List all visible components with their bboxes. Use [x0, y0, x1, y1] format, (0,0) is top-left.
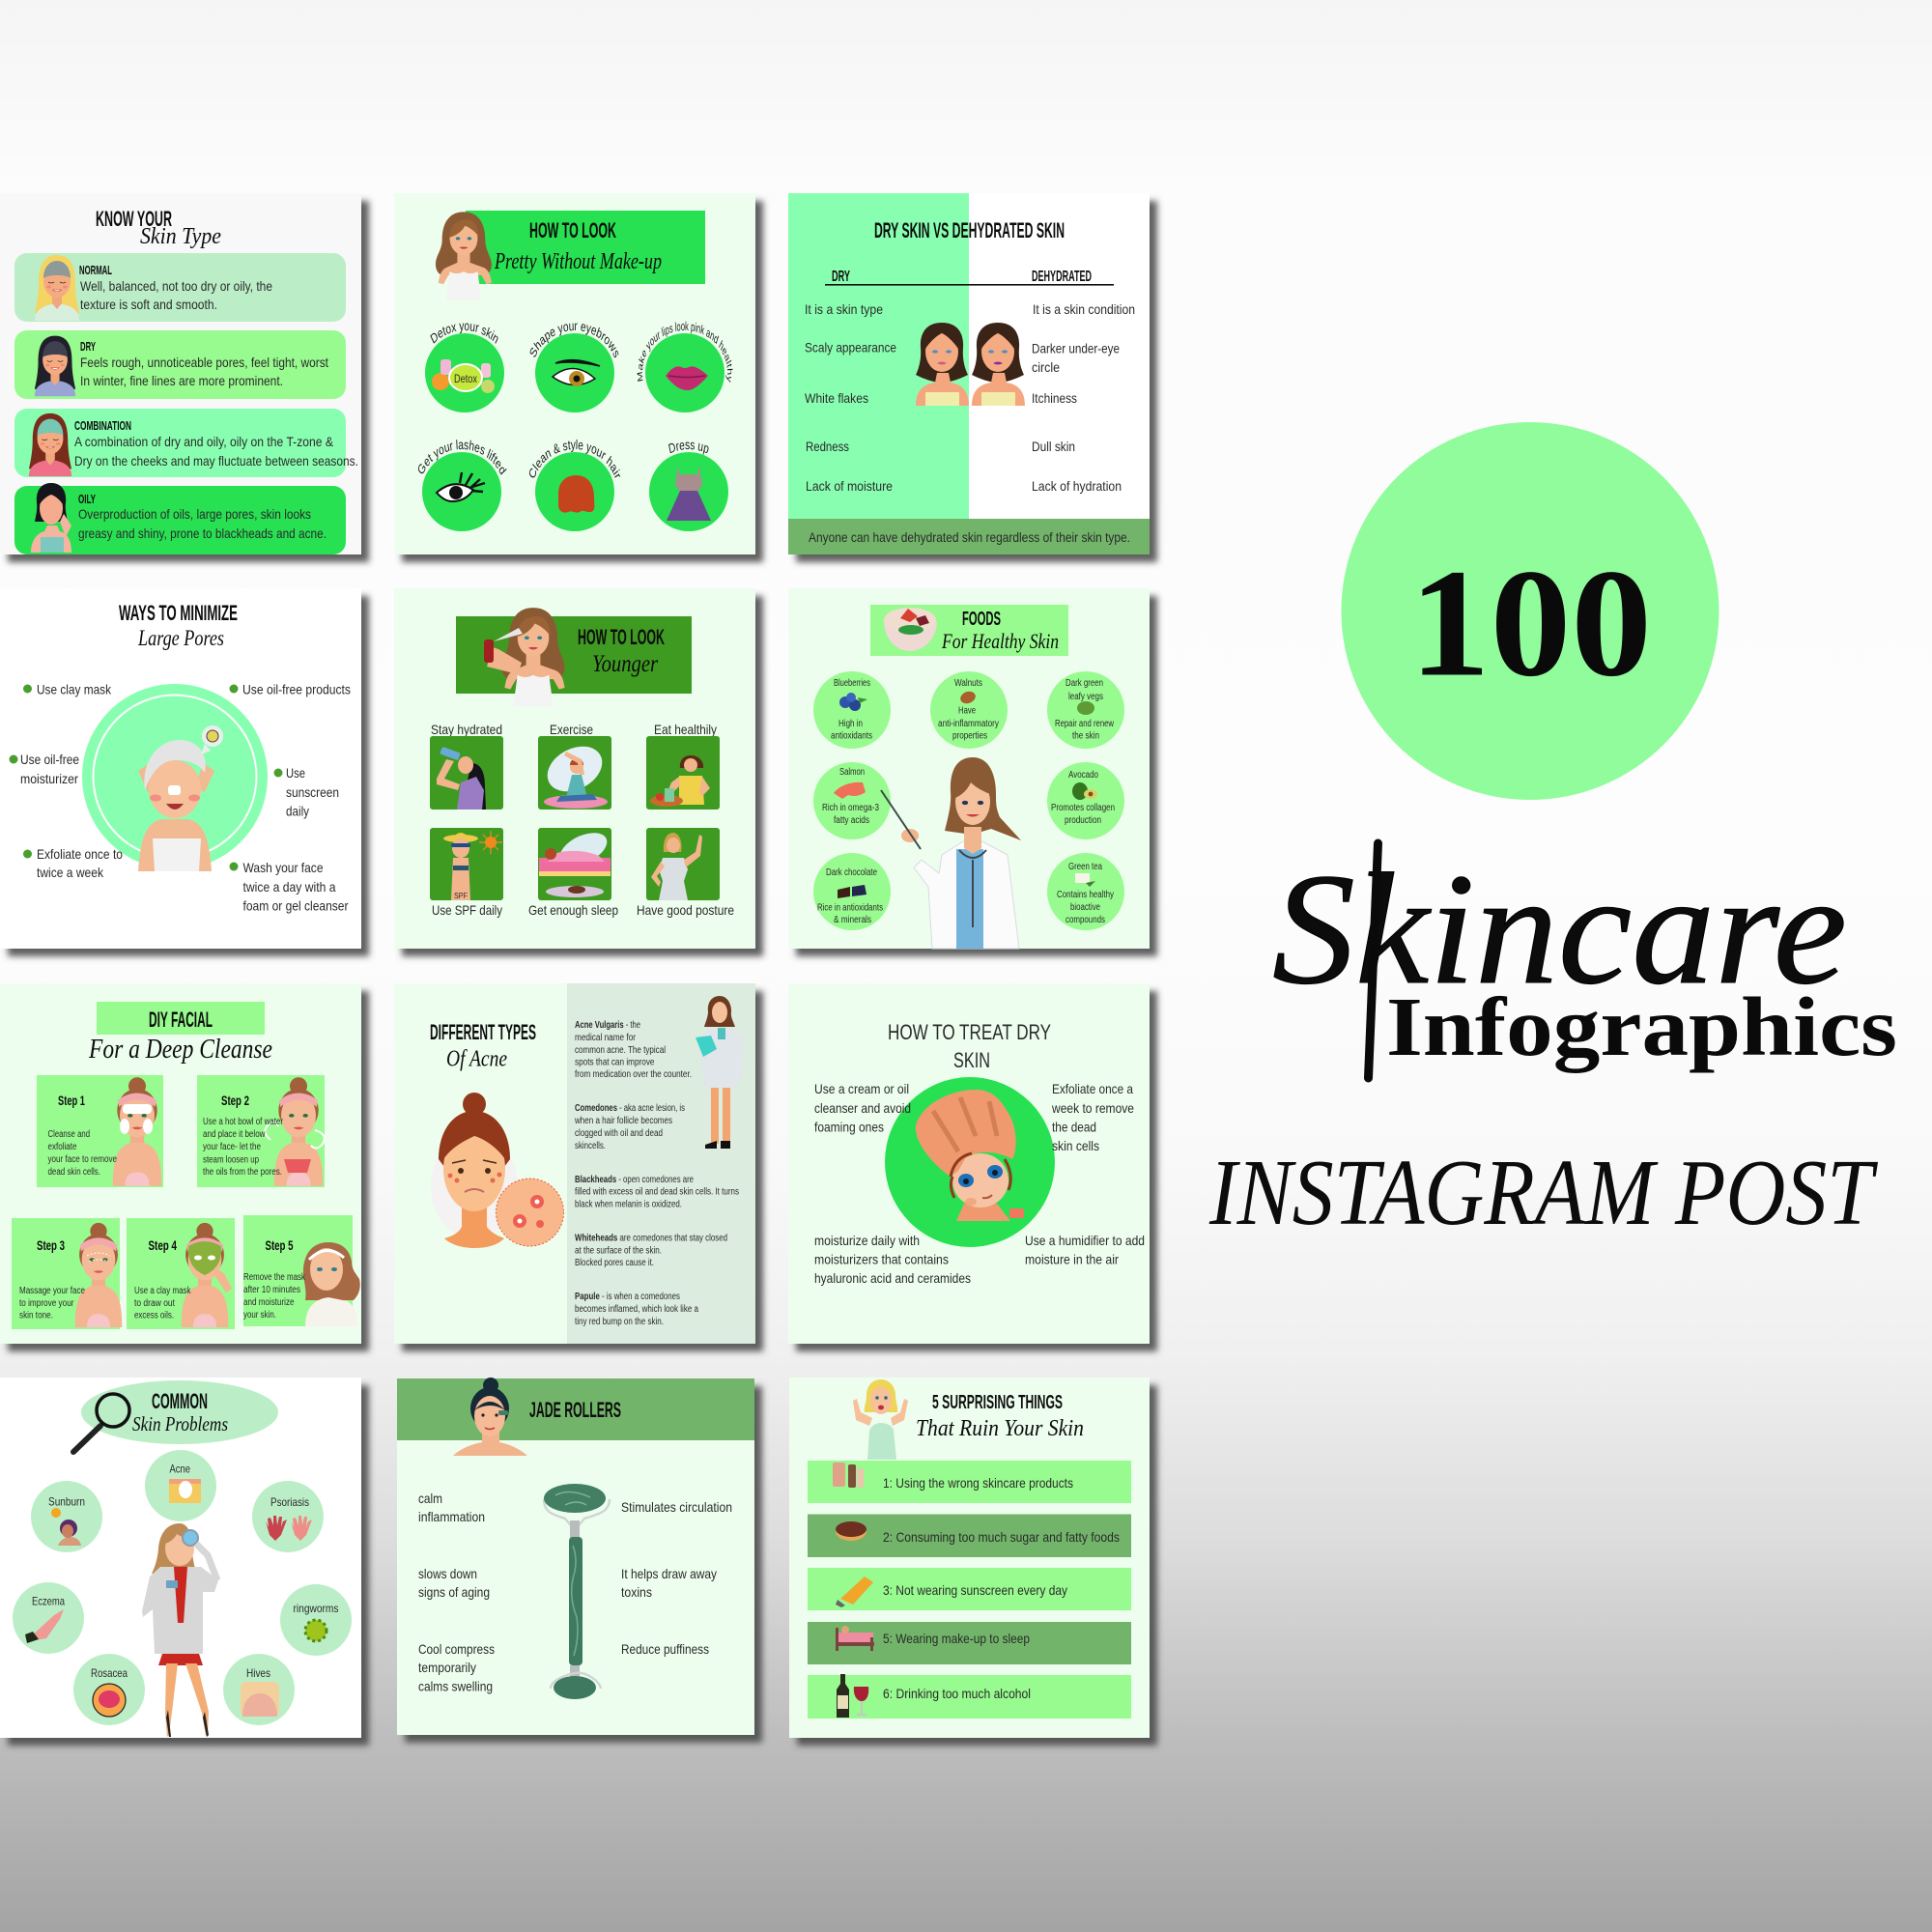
tip: moisturize: moisturizers that contains [814, 1252, 949, 1267]
step 3: to improve your [19, 1298, 74, 1309]
heading: Large Pores [137, 626, 224, 650]
food: avocado: Avocado [1068, 770, 1098, 781]
tip: cleanser: cleanser and avoid [814, 1100, 911, 1116]
heading: For a Deep Cleanse [88, 1035, 272, 1065]
tip: detox [425, 323, 504, 412]
list: dehydrated [1032, 301, 1135, 494]
card: stay hydrated: Stay hydrated [431, 722, 502, 737]
panel: 5 surprising things [789, 1378, 1150, 1738]
bullet: oil-free products: Use oil-free products [242, 682, 351, 697]
text: right benefits: It helps draw away [621, 1566, 717, 1581]
row: dry: In winter, fine lines are more prominent. [80, 373, 283, 388]
tip: hair: Clean & style your hair [529, 439, 620, 478]
heading [88, 1002, 272, 1065]
illustration: woman with spray [484, 608, 565, 706]
text: acne definitions: common acne. The typical [575, 1045, 666, 1056]
text: acne definitions: filled with excess oil and dead skin cells. It turns [575, 1186, 739, 1198]
bullet: wash face [230, 860, 349, 914]
tip: dress: Dress up [668, 442, 709, 455]
list: dehydrated: circle [1032, 359, 1060, 375]
problem: hives: Hives [246, 1666, 270, 1680]
text: right benefits: Stimulates circulation [621, 1499, 732, 1515]
list: dehydrated: Dull skin [1032, 439, 1075, 454]
food: walnuts: Walnuts [954, 678, 982, 689]
title: skincare infographics: Infographics [1386, 980, 1897, 1073]
food: blueberries: antioxidants [831, 730, 872, 742]
tip: moisturize: moisturize daily with [814, 1233, 920, 1248]
step 1: Cleanse and [48, 1129, 90, 1140]
food: walnuts: properties [952, 730, 987, 742]
badge: 100 [1341, 422, 1719, 800]
food: salmon: Salmon [839, 767, 865, 778]
text: left benefits: temporarily [418, 1660, 476, 1675]
row: oily: greasy and shiny, prone to blackheads and acne. [78, 526, 327, 541]
text: acne definitions: clogged with oil and dead [575, 1128, 663, 1139]
panel: different types of acne [394, 983, 755, 1344]
panel: know your skin type [0, 193, 361, 554]
text: right benefits: toxins [621, 1584, 652, 1600]
step 2: Use a hot bowl of water [203, 1117, 284, 1127]
tip: cleanser [814, 1081, 911, 1134]
text: acne definitions: at the surface of the skin. [575, 1246, 662, 1256]
tip: exfoliate [1051, 1081, 1134, 1153]
text: acne definitions: Acne Vulgaris - the [575, 1020, 640, 1031]
food: leafy greens [1047, 671, 1124, 749]
column headers: DEHYDRATED [1032, 269, 1092, 285]
heading: know your skin type [96, 207, 221, 249]
row: dry: Feels rough, unnoticeable pores, feel tight, worst [80, 355, 328, 370]
card: get enough sleep: Get enough sleep [528, 902, 618, 918]
illustration: woman with roller [453, 1378, 527, 1456]
tip: moisturize: hyaluronic acid and ceramides [814, 1270, 971, 1286]
heading: Of Acne [446, 1047, 507, 1072]
heading: That Ruin Your Skin [916, 1416, 1084, 1441]
bullet: wash face: foam or gel cleanser [243, 898, 349, 914]
food: leafy greens: Dark green [1065, 678, 1103, 689]
step 5 [243, 1215, 360, 1326]
step 1: dead skin cells. [48, 1167, 100, 1178]
row: combination: COMBINATION [74, 418, 131, 433]
problem: ringworms [280, 1584, 352, 1656]
heading: 5 SURPRISING THINGS [932, 1392, 1063, 1413]
text: acne definitions: spots that can improve [575, 1057, 655, 1068]
food: dark chocolate [813, 853, 891, 930]
text: right benefits [621, 1499, 732, 1657]
text: acne definitions: when a hair follicle becomes [574, 1116, 672, 1126]
food: walnuts: Have [958, 705, 976, 717]
heading [119, 601, 238, 650]
food: salmon: fatty acids [834, 815, 869, 826]
list: dry: It is a skin type [805, 301, 883, 317]
heading [73, 1380, 278, 1452]
card: get enough sleep [528, 826, 618, 918]
problem: sunburn [31, 1481, 102, 1552]
step 4: Step 4 [149, 1237, 177, 1253]
text: acne definitions: medical name for [575, 1033, 637, 1043]
card: good posture: Have good posture [637, 902, 734, 918]
problem: hives [223, 1654, 295, 1725]
problem: eczema [13, 1582, 84, 1654]
list: dehydrated: Itchiness [1032, 390, 1077, 406]
text: acne definitions: becomes inflamed, which look like a [575, 1304, 698, 1315]
step 4 [127, 1218, 235, 1329]
bullet: wash face: Wash your face [243, 860, 324, 875]
list: dry: Lack of moisture [806, 478, 893, 494]
title: skincare infographics: Skincare [1272, 840, 1847, 1017]
row: oily: OILY [78, 492, 96, 506]
list item 2 [808, 1515, 1131, 1557]
row: dry: DRY [80, 339, 96, 354]
list: dry: Redness [806, 439, 849, 454]
heading: WAYS TO MINIMIZE [119, 601, 238, 625]
food: green tea: Contains healthy [1057, 890, 1114, 900]
list: dehydrated: Darker under-eye [1032, 340, 1120, 355]
food: leafy greens: Repair and renew [1055, 719, 1115, 729]
food: blueberries [813, 671, 891, 749]
list: dehydrated: It is a skin condition [1033, 301, 1135, 317]
text: left benefits: signs of aging [418, 1584, 490, 1600]
text: left benefits: Cool compress [418, 1641, 495, 1657]
list: dry: White flakes [805, 390, 868, 406]
problem: psoriasis [252, 1481, 324, 1552]
panel: how to treat dry skin [788, 983, 1150, 1344]
step 5: Step 5 [265, 1237, 294, 1253]
heading: DIY FACIAL [149, 1008, 213, 1032]
card: stay hydrated [430, 722, 503, 810]
heading [430, 1020, 536, 1072]
footer note: Anyone can have dehydrated skin regardless of their skin type. [809, 529, 1130, 545]
bullet: oil-free moisturizer: Use oil-free [20, 752, 79, 767]
tip: lashes [417, 440, 506, 531]
card: use SPF daily: Use SPF daily [432, 902, 502, 918]
illustration: woman with nose strip [82, 684, 268, 871]
step 4: excess oils. [134, 1310, 174, 1321]
list: dehydrated: Lack of hydration [1032, 478, 1122, 494]
food: salmon [813, 762, 891, 839]
tip: moisturize [814, 1233, 971, 1286]
heading: HOW TO TREAT DRY [888, 1020, 1051, 1044]
heading banner: FOODS [962, 609, 1001, 630]
tip: exfoliate: week to remove [1051, 1100, 1134, 1116]
food: leafy greens: leafy vegs [1068, 692, 1103, 702]
step 4: to draw out [134, 1298, 175, 1309]
text: left benefits: calm [418, 1491, 442, 1506]
food: green tea [1047, 853, 1124, 930]
illustration: dehydrated face [972, 323, 1025, 406]
tip: lashes: Get your lashes lifted [417, 440, 506, 475]
food: dark chocolate: & minerals [834, 915, 871, 925]
tip: humidifier: moisture in the air [1025, 1252, 1119, 1267]
text: acne definitions: skincells. [575, 1141, 606, 1151]
list item 2: 2: Consuming too much sugar and fatty foods [883, 1529, 1120, 1545]
step 2: your face- let the [203, 1142, 261, 1152]
text: acne definitions [574, 1020, 739, 1327]
food: walnuts [930, 671, 1008, 749]
card: eat healthily [646, 722, 720, 810]
list item 1 [808, 1461, 1131, 1503]
step 5: and moisturize [243, 1297, 295, 1308]
list item 5 [808, 1674, 1131, 1719]
step 1: your face to remove [48, 1154, 117, 1165]
list item 4 [808, 1622, 1131, 1664]
list: dry [805, 301, 896, 494]
row: normal [14, 253, 346, 322]
food: green tea: Green tea [1068, 862, 1102, 872]
bullet: sunscreen [274, 765, 339, 819]
step 2: and place it below [203, 1129, 266, 1140]
bullet: sunscreen: daily [286, 804, 309, 819]
list item 5: 6: Drinking too much alcohol [883, 1686, 1031, 1701]
step 5: your skin. [243, 1310, 276, 1321]
row: combination: A combination of dry and oily, oily on the T-zone & [74, 434, 334, 449]
list item 1: 1: Using the wrong skincare products [883, 1475, 1073, 1491]
step 3: Step 3 [37, 1237, 65, 1253]
step 5: Remove the mask [243, 1272, 306, 1283]
row: normal: texture is soft and smooth. [80, 297, 217, 312]
illustration: woman with towel [885, 1077, 1055, 1247]
panel: ways to minimize large pores [0, 588, 361, 949]
panel: how to look younger [394, 588, 755, 949]
food: dark chocolate: Rice in antioxidants [817, 902, 883, 914]
list item 3 [808, 1568, 1131, 1610]
text: acne definitions: Papule - is when a comedones [575, 1292, 680, 1302]
heading banner [456, 616, 692, 694]
card: exercise [538, 722, 611, 810]
row: combination [14, 409, 358, 477]
step 3 [12, 1218, 122, 1329]
badge: 100: 100 [1409, 537, 1652, 709]
text: acne definitions: Blocked pores cause it. [575, 1258, 654, 1268]
food: avocado: Promotes collagen [1051, 803, 1115, 813]
panel: dry skin vs dehydrated skin [788, 193, 1150, 554]
step 2: the oils from the pores. [203, 1167, 282, 1178]
food: avocado: production [1065, 815, 1101, 826]
tip: eyebrows: Shape your eyebrows [529, 323, 618, 357]
row: oily [14, 483, 346, 554]
text: left benefits: calms swelling [418, 1679, 493, 1694]
footer note [788, 519, 1150, 554]
panel: common skin problems [0, 1378, 361, 1738]
bullet: exfoliate [23, 846, 123, 880]
food: green tea: bioactive [1070, 902, 1100, 913]
heading banner: For Healthy Skin [941, 629, 1059, 653]
illustration: doctor with magnifier [142, 1523, 218, 1737]
tip: hair [529, 439, 620, 531]
problem: rosacea: Rosacea [91, 1666, 128, 1680]
heading banner [466, 211, 705, 284]
title: skincare infographics [1272, 840, 1897, 1078]
text: left benefits: slows down [418, 1566, 477, 1581]
food: leafy greens: the skin [1072, 730, 1099, 742]
step 1: Step 1 [58, 1093, 85, 1108]
illustration: doctor with pointer [881, 757, 1021, 949]
bullet: exfoliate: Exfoliate once to [37, 846, 123, 862]
heading: COMMON [152, 1389, 208, 1413]
tip: detox: Detox [454, 372, 477, 385]
heading banner [870, 605, 1068, 656]
step 3: skin tone. [19, 1310, 53, 1321]
illustration: acne face [431, 1093, 564, 1248]
card: use SPF daily: SPF [454, 892, 468, 900]
heading banner: Younger [592, 651, 658, 677]
problem: sunburn: Sunburn [48, 1495, 85, 1509]
step 3: Massage your face [19, 1286, 85, 1296]
list item 3: 3: Not wearing sunscreen every day [883, 1582, 1067, 1598]
bullet: sunscreen: sunscreen [286, 784, 339, 800]
problem: eczema: Eczema [32, 1594, 65, 1607]
food: dark chocolate: Dark chocolate [826, 867, 877, 878]
text: acne definitions: black when melanin is oxidized. [575, 1200, 682, 1209]
text: acne definitions: Comedones - aka acne lesion, is [575, 1103, 685, 1114]
heading banner: Pretty Without Make-up [494, 249, 662, 274]
tip: dress [649, 442, 728, 531]
text: acne definitions: Whiteheads are comedones that stay closed [575, 1233, 727, 1244]
row: normal: Well, balanced, not too dry or oily, the [80, 278, 272, 294]
problem: acne [145, 1450, 216, 1521]
panel: foods for healthy skin [788, 588, 1150, 949]
bullet: oil-free moisturizer [10, 752, 79, 786]
panel: how to look pretty [394, 193, 768, 567]
food: avocado [1047, 762, 1124, 839]
heading: SKIN [953, 1048, 990, 1072]
food: walnuts: anti-inflammatory [938, 719, 999, 729]
tip: exfoliate: the dead [1052, 1119, 1096, 1134]
heading: Skin Problems [132, 1412, 228, 1435]
card: exercise: Exercise [550, 722, 593, 737]
list item 4: 5: Wearing make-up to sleep [883, 1631, 1030, 1646]
row: dry [14, 330, 346, 399]
card: good posture [637, 828, 734, 918]
tip: humidifier: Use a humidifier to add [1025, 1233, 1145, 1248]
text: acne definitions: tiny red bump on the skin. [575, 1317, 664, 1327]
step 1: exfoliate [48, 1142, 77, 1152]
tip: humidifier [1025, 1233, 1145, 1267]
heading banner: HOW TO LOOK [529, 218, 616, 242]
tip: cleanser: Use a cream or oil [814, 1081, 909, 1096]
illustration: woman [436, 212, 492, 299]
heading: JADE ROLLERS [529, 1398, 621, 1422]
step 2 [197, 1075, 325, 1187]
bullet: sunscreen: Use [286, 765, 305, 781]
text: acne definitions: from medication over the counter. [575, 1069, 692, 1080]
food: salmon: Rich in omega-3 [822, 803, 879, 813]
heading: DRY SKIN VS DEHYDRATED SKIN [874, 218, 1065, 242]
step 1 [37, 1075, 163, 1187]
panel: DIY facial [0, 983, 361, 1344]
problem: psoriasis: Psoriasis [270, 1495, 309, 1509]
text: left benefits: inflammation [418, 1509, 485, 1524]
text: right benefits: Reduce puffiness [621, 1641, 709, 1657]
row: combination: Dry on the cheeks and may fluctuate between seasons. [74, 453, 358, 469]
problem: acne: Acne [170, 1463, 190, 1476]
list: dry: Scaly appearance [805, 340, 896, 355]
food: green tea: compounds [1065, 915, 1105, 925]
illustration: worried woman [853, 1379, 908, 1460]
bullet: clay mask: Use clay mask [37, 682, 112, 697]
heading: DIFFERENT TYPES [430, 1020, 536, 1044]
tip: lips [638, 321, 732, 412]
row: oily: Overproduction of oils, large pores, skin looks [78, 506, 311, 522]
panel: jade rollers [397, 1378, 754, 1735]
tip: cleanser: foaming ones [814, 1119, 884, 1134]
heading [888, 1020, 1051, 1072]
row: normal: NORMAL [79, 263, 112, 277]
column headers [825, 269, 1114, 286]
illustration: jade roller [544, 1484, 610, 1699]
heading: know your skin type: KNOW YOUR [96, 207, 172, 231]
food: blueberries: Blueberries [834, 678, 870, 689]
card: use SPF daily [430, 828, 503, 918]
heading banner: HOW TO LOOK [578, 625, 665, 649]
tip: detox: Detox your skin [430, 323, 498, 344]
text: acne definitions: Blackheads - open comedones are [575, 1175, 694, 1185]
heading: know your skin type: Skin Type [140, 224, 221, 249]
column headers: DRY [832, 269, 850, 285]
step 5: after 10 minutes [243, 1285, 300, 1295]
tip: exfoliate: Exfoliate once a [1052, 1081, 1133, 1096]
heading [916, 1392, 1084, 1441]
bullet: wash face: twice a day with a [243, 879, 336, 895]
problem: ringworms: ringworms [294, 1602, 338, 1615]
problem: rosacea [73, 1654, 145, 1725]
tip: exfoliate: skin cells [1052, 1138, 1099, 1153]
step 4: Use a clay mask [134, 1286, 191, 1296]
tip: lips: Make your lips look pink and healthy [638, 321, 732, 383]
food: blueberries: High in [838, 719, 863, 729]
text: left benefits [418, 1491, 495, 1694]
card: eat healthily: Eat healthily [654, 722, 717, 737]
tip: eyebrows [529, 323, 618, 412]
illustration: doctor with clipboard [696, 996, 744, 1149]
step 2: steam loosen up [203, 1155, 259, 1165]
bullet: oil-free moisturizer: moisturizer [20, 771, 78, 786]
step 2: Step 2 [221, 1093, 249, 1108]
bullet: exfoliate: twice a week [37, 865, 104, 880]
illustration: dry face [916, 323, 969, 406]
